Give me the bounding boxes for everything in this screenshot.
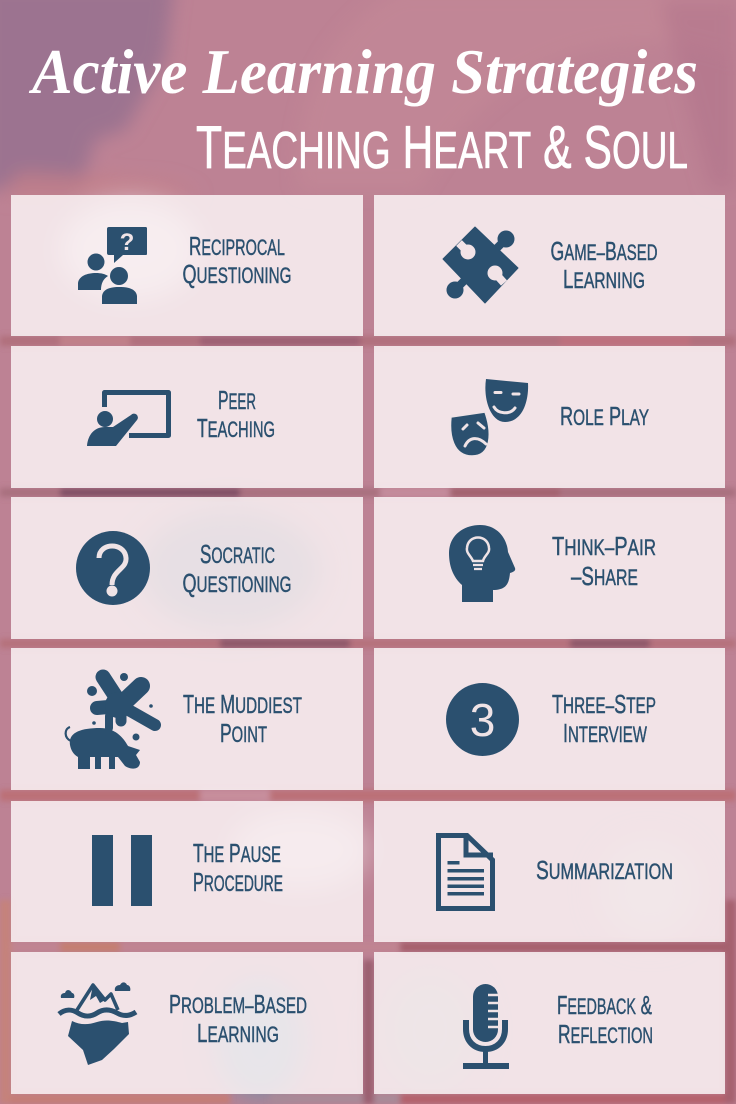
label: ROLE PLAY (560, 401, 649, 431)
icon: question mark circle (76, 531, 150, 605)
label: TEACHING (197, 413, 275, 443)
label (552, 531, 656, 591)
label: THE MUDDIEST (183, 689, 302, 719)
label (557, 990, 653, 1049)
panel: peer teaching (11, 346, 363, 488)
label: GAME–BASED (550, 236, 658, 266)
label: REFLECTION (558, 1019, 653, 1049)
label: PROCEDURE (193, 867, 283, 897)
label (183, 689, 302, 748)
title: Active Learning Strategies (28, 37, 698, 107)
label: –SHARE (571, 561, 638, 591)
label: POINT (220, 718, 267, 748)
label (182, 539, 292, 598)
panel: summarization (374, 801, 725, 942)
label: QUESTIONING (182, 259, 292, 289)
label: THINK–PAIR (552, 531, 656, 561)
panel: reciprocal questioning (11, 195, 363, 336)
icon: microphone (463, 984, 509, 1069)
label (169, 989, 307, 1048)
label: SUMMARIZATION (536, 855, 673, 885)
panel: think-pair-share (374, 497, 725, 639)
label (552, 689, 656, 748)
label: LEARNING (563, 264, 645, 294)
label: SOCRATIC (200, 539, 275, 569)
label: RECIPROCAL (189, 231, 285, 261)
icon: speech bubble and two people (78, 227, 147, 304)
label: PEER (218, 385, 256, 415)
label: THE PAUSE (193, 838, 281, 868)
icon: number three circle: 3 (470, 694, 495, 746)
icon: head with light bulb (449, 525, 515, 602)
label (182, 231, 292, 289)
icon: puzzle piece (443, 227, 518, 303)
panel: problem-based learning (11, 952, 363, 1094)
panel: socratic questioning (11, 497, 363, 639)
label: QUESTIONING (182, 568, 292, 598)
label (197, 385, 275, 443)
label: PROBLEM–BASED (169, 989, 307, 1019)
panel: game-based learning (374, 195, 725, 336)
subtitle: TEACHING HEART & SOUL (196, 114, 688, 181)
panel: the pause procedure (11, 801, 363, 942)
label: INTERVIEW (563, 718, 647, 748)
label: THREE–STEP (552, 689, 656, 719)
panel: feedback and reflection (374, 952, 725, 1094)
panel: the muddiest point (11, 648, 363, 790)
panel: role play (374, 346, 725, 488)
label (550, 236, 658, 294)
label (193, 838, 283, 897)
panel: three-step interview (374, 648, 725, 790)
icon: pause bars (92, 835, 152, 906)
icon: number three circle (446, 683, 519, 756)
icon: document (438, 835, 493, 908)
icon: iceberg (59, 982, 136, 1065)
icon: speech bubble and two people: ? (120, 229, 134, 256)
label: FEEDBACK & (557, 990, 652, 1020)
icon: pig and mud splat (66, 673, 155, 769)
label: LEARNING (197, 1018, 279, 1048)
icon: theatre masks (451, 379, 528, 456)
icon: person at board (87, 392, 168, 446)
